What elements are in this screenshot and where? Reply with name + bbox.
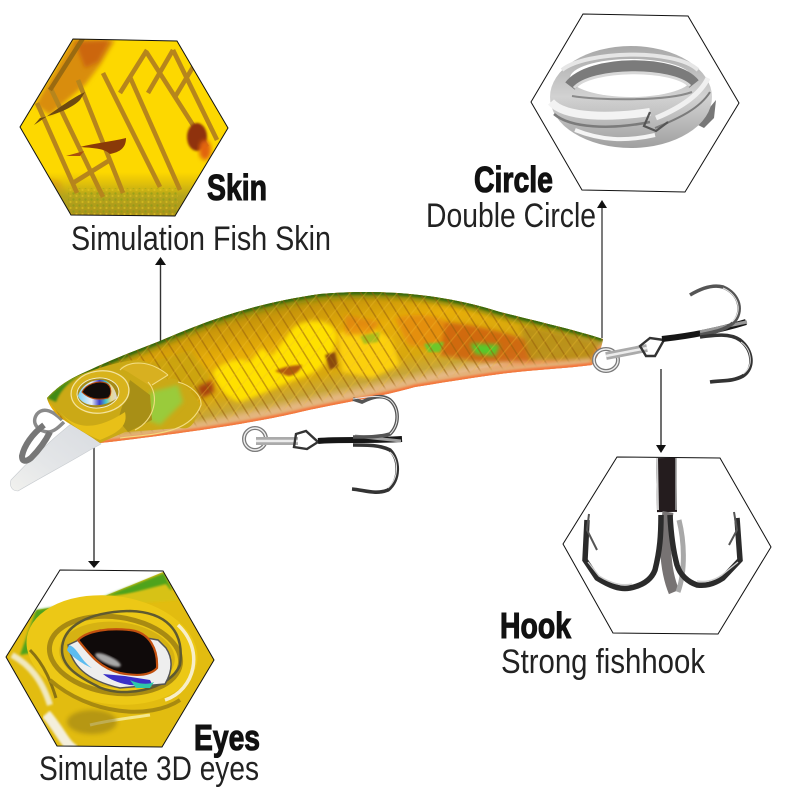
- icon: tail treble hook: [594, 286, 751, 382]
- arrow: skin callout: [155, 257, 166, 341]
- text: Double Circle: Double Circle: [426, 197, 596, 235]
- icon: lower treble hook: [244, 396, 402, 492]
- text: Strong fishhook: Strong fishhook: [501, 643, 706, 681]
- arrow: eye callout: [88, 408, 100, 568]
- head plate: [47, 360, 200, 443]
- heading: Circle: Circle: [474, 159, 553, 200]
- heading: Hook: Hook: [500, 605, 572, 646]
- text: Simulation Fish Skin: Simulation Fish Skin: [71, 220, 331, 258]
- panel: skin close-up hexagon: [15, 35, 235, 220]
- icon: split ring: [550, 46, 716, 148]
- heading: Eyes: Eyes: [194, 717, 260, 758]
- arrow: circle callout: [597, 200, 607, 338]
- arrow: hook callout: [656, 369, 666, 453]
- text: Simulate 3D eyes: Simulate 3D eyes: [39, 750, 259, 788]
- heading: Skin: Skin: [207, 167, 267, 208]
- nose ring: [22, 410, 64, 461]
- lure lip: [10, 423, 101, 491]
- illustration: fishing lure: [10, 285, 610, 491]
- panel: hook close-up hexagon: [563, 457, 771, 634]
- panel: eye close-up hexagon: [6, 570, 214, 748]
- lure eye: [67, 366, 133, 418]
- icon: treble hook close-up: [585, 458, 740, 592]
- panel: double circle ring hexagon: [531, 14, 739, 192]
- lure body: [47, 292, 603, 443]
